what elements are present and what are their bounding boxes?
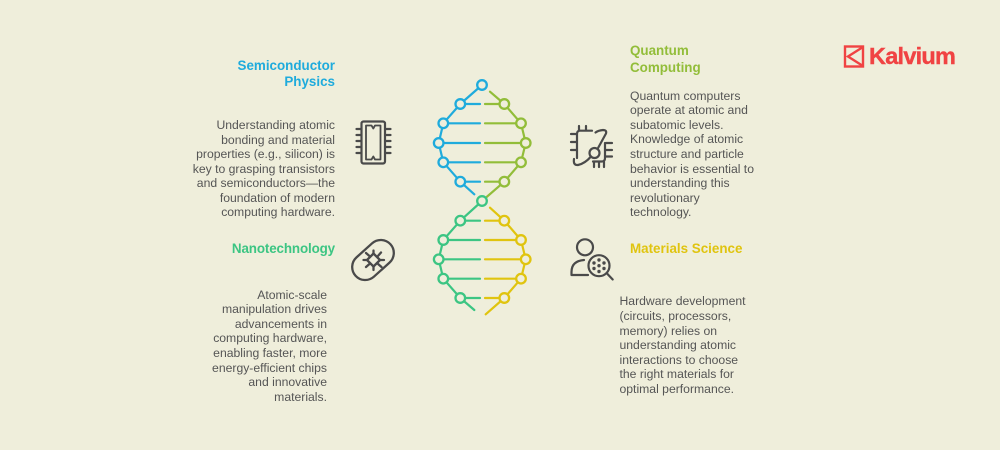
icon: quantum chip xyxy=(571,126,612,167)
DNA strand: blue upper left xyxy=(434,80,487,194)
icon: microchip xyxy=(356,122,390,164)
heading: Materials Science: Materials Science xyxy=(630,240,742,256)
text block: Quantum Computing description: revolutionary xyxy=(630,191,700,205)
heading: Quantum Computing: Computing xyxy=(630,60,701,75)
text block: Semiconductor Physics description: bonding and material xyxy=(221,133,335,147)
text block: Semiconductor Physics description: properties (e.g., silicon) is xyxy=(196,147,335,161)
text block: Nanotechnology description: advancements in xyxy=(235,317,327,331)
text block: Semiconductor Physics description: computing hardware. xyxy=(221,205,335,219)
text block: Nanotechnology description: enabling faster, more xyxy=(213,346,327,360)
text block: Materials Science description xyxy=(620,294,746,396)
text block: Quantum Computing description: technology. xyxy=(630,205,691,219)
text block: Quantum Computing description: Knowledge of atomic xyxy=(630,132,743,146)
text block: Quantum Computing description: Quantum computers xyxy=(630,89,740,103)
text block: Nanotechnology description: computing hardware, xyxy=(213,331,327,345)
text block: Nanotechnology description: energy-efficient chips xyxy=(212,360,327,374)
logo: Kalvium: Kalvium xyxy=(869,43,955,69)
text block: Materials Science description: memory) relies on xyxy=(620,324,717,338)
text block: Quantum Computing description: understanding this xyxy=(630,176,730,190)
DNA strand: yellow lower right xyxy=(485,208,530,314)
heading: Quantum Computing xyxy=(630,43,701,75)
text block: Semiconductor Physics description xyxy=(193,118,335,219)
text block: Nanotechnology description: Atomic-scale xyxy=(257,288,327,302)
heading: Nanotechnology: Nanotechnology xyxy=(232,240,335,256)
text block: Semiconductor Physics description: foundation of modern xyxy=(220,191,335,205)
heading: Semiconductor Physics: Physics xyxy=(284,74,335,89)
text block: Quantum Computing description: behavior is essential to xyxy=(630,162,754,176)
text block: Semiconductor Physics description: key to grasping transistors xyxy=(193,162,335,176)
text block: Semiconductor Physics description: Understanding atomic xyxy=(216,118,335,132)
text block: Nanotechnology description xyxy=(212,288,327,404)
text block: Nanotechnology description: and innovative xyxy=(248,375,327,389)
text block: Quantum Computing description: subatomic levels. xyxy=(630,118,723,132)
DNA strand: green lower left xyxy=(434,196,487,310)
text block: Materials Science description: interactions to choose xyxy=(620,353,738,367)
text block: Materials Science description: optimal performance. xyxy=(620,382,734,396)
text block: Quantum Computing description: operate at atomic and xyxy=(630,103,748,117)
icon: nanotechnology capsule xyxy=(347,235,399,285)
heading: Quantum Computing: Quantum xyxy=(630,43,689,58)
text block: Materials Science description: (circuits, processors, xyxy=(620,309,731,323)
text block: Nanotechnology description: materials. xyxy=(274,390,327,404)
text block: Semiconductor Physics description: and semiconductors—the xyxy=(197,176,335,190)
text block: Quantum Computing description xyxy=(630,89,754,219)
DNA strand: lime upper right xyxy=(482,92,530,201)
icon: person with magnifier xyxy=(572,239,613,280)
text block: Materials Science description: Hardware development xyxy=(620,294,746,308)
heading: Semiconductor Physics xyxy=(238,58,335,89)
text block: Materials Science description: understanding atomic xyxy=(620,338,736,352)
heading: Semiconductor Physics: Semiconductor xyxy=(238,58,335,72)
text block: Materials Science description: the right materials for xyxy=(620,367,734,381)
text block: Nanotechnology description: manipulation drives xyxy=(222,302,327,316)
text block: Quantum Computing description: structure and particle xyxy=(630,147,744,161)
